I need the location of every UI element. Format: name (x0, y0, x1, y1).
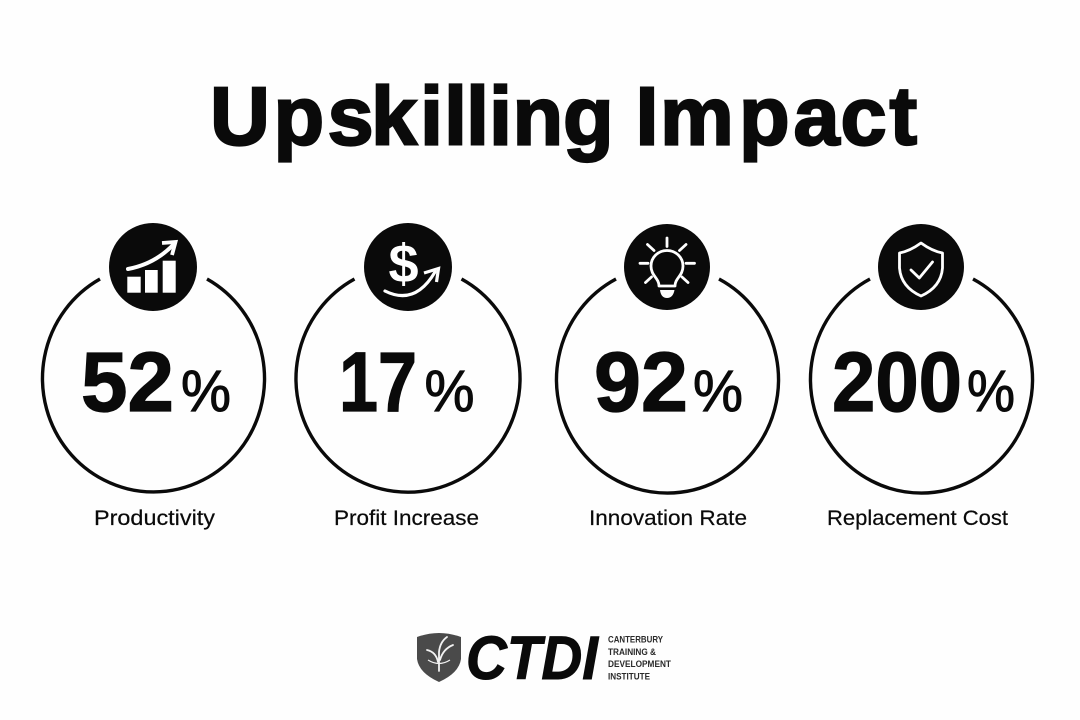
icon: shield with check (878, 224, 964, 310)
value: 52%: % (181, 359, 231, 424)
institute name: INSTITUTE (608, 671, 650, 681)
label: innovation rate: Innovation Rate (589, 507, 747, 530)
icon: shield crest (417, 633, 461, 682)
value: 200%: % (967, 359, 1015, 424)
label: profit increase: Profit Increase (334, 507, 479, 530)
label: replacement cost: Replacement Cost (827, 507, 1008, 530)
institute name (608, 634, 671, 681)
value: 17%: % (424, 359, 474, 424)
institute name: TRAINING & (608, 647, 656, 657)
panel: profit increase (296, 223, 520, 530)
value: 92%: 92 (594, 335, 688, 429)
value: 92%: % (693, 359, 743, 424)
institute name: DEVELOPMENT (608, 659, 671, 669)
value: 92% (594, 335, 743, 429)
icon: light bulb (624, 224, 710, 310)
label: productivity: Productivity (94, 507, 216, 530)
value: 200%: 200 (832, 335, 962, 429)
value: 17%: 17 (339, 335, 417, 429)
ring: innovation rate (557, 279, 778, 493)
value: 52%: 52 (81, 335, 174, 429)
title: Upskilling Impact (210, 70, 917, 162)
wordmark: CTDI (466, 624, 599, 692)
ring: replacement cost (810, 279, 1032, 493)
panel: productivity (43, 223, 265, 530)
logo: CTDI (417, 624, 671, 692)
value: 52% (81, 335, 231, 429)
ring: productivity (43, 279, 265, 492)
icon: dollar with curved arrow: $ (388, 234, 419, 294)
panel: innovation rate (557, 224, 778, 530)
panel: replacement cost (810, 224, 1032, 530)
icon: dollar with curved arrow (364, 223, 452, 311)
institute name: CANTERBURY (608, 634, 663, 644)
value: 17% (339, 335, 474, 429)
icon: bar chart with rising arrow (109, 223, 197, 311)
ring: profit increase (296, 279, 520, 492)
